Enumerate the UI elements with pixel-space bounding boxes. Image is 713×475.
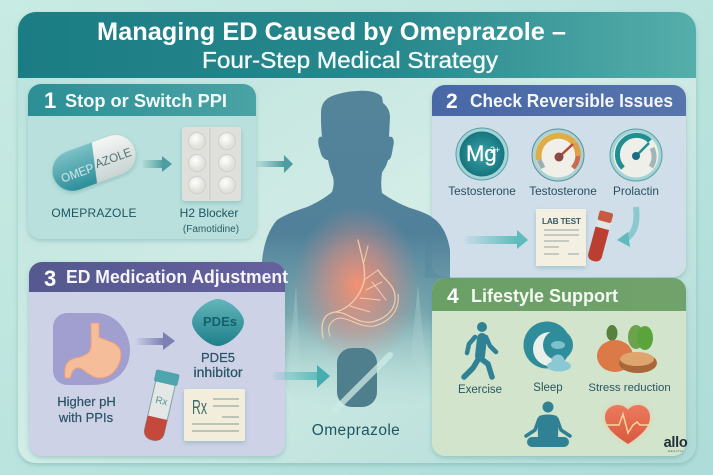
title banner xyxy=(18,12,696,78)
arrow: panel 1 to body xyxy=(256,155,293,173)
icon: Mg badge: 2+ xyxy=(490,145,500,155)
label stress reduction: Stress reduction xyxy=(588,382,671,394)
icon: gauge 1 xyxy=(532,129,584,181)
label higher pH: Higher pH xyxy=(57,394,116,409)
icon: prescription pad xyxy=(184,389,245,441)
logo: allo xyxy=(664,435,688,451)
subtitle: Four-Step Medical Strategy xyxy=(202,47,499,73)
panel 3: ED medication adjustment: with PPIs xyxy=(58,410,114,425)
icon: meditation figure xyxy=(526,402,570,447)
panel 3: ED medication adjustment: inhibitor xyxy=(193,364,243,380)
icon: walking person xyxy=(464,322,496,377)
label exercise: Exercise xyxy=(458,384,502,396)
label prolactin: Prolactin xyxy=(613,184,659,198)
icon: blood tube xyxy=(587,210,613,263)
title: Managing ED Caused by Omeprazole – xyxy=(97,18,566,46)
icon: moon and clouds xyxy=(524,322,573,372)
panel 3: ED medication adjustment: ED Medication Adjustment xyxy=(66,267,288,287)
stomach in body xyxy=(322,240,398,338)
omeprazole label: Omeprazole xyxy=(312,422,400,439)
icon: omeprazole capsule xyxy=(47,129,141,197)
panel 3 heading: 3 xyxy=(44,266,56,291)
body shoulder over panel 2 xyxy=(426,214,450,278)
icon: PDE5 diamond pill: PDEs xyxy=(203,314,237,329)
icon: omeprazole capsule: AZOLE xyxy=(94,147,134,171)
label H2 blocker: H2 Blocker xyxy=(180,206,238,220)
panel 2 heading: 2 xyxy=(446,90,458,113)
crossed-out omeprazole pill xyxy=(335,348,390,410)
panel 1: stop or switch PPI xyxy=(28,84,256,239)
panel 4: lifestyle support xyxy=(432,278,688,456)
icon: Rx tube xyxy=(141,369,180,443)
label sleep: Sleep xyxy=(533,382,563,394)
panel 4 heading: 4 xyxy=(447,285,459,308)
panel 2: check reversible issues xyxy=(432,85,686,277)
label famotidine: (Famotidine) xyxy=(183,224,239,235)
panel 1: stop or switch PPI: Stop or Switch PPI xyxy=(65,91,227,111)
label omeprazole: OMEPRAZOLE xyxy=(51,206,137,220)
icon: stomach xyxy=(53,313,130,385)
arrow: curved to lab xyxy=(622,207,636,241)
icon: lab test report xyxy=(536,209,586,266)
icon: lab test report: LAB TEST xyxy=(542,216,581,226)
icon: gauge 2 xyxy=(610,129,662,181)
arrow xyxy=(137,332,175,350)
icon: omeprazole capsule: OMEP xyxy=(60,163,96,186)
arrow: panel 3 to body xyxy=(273,365,330,388)
label testosterone: Testosterone xyxy=(448,184,516,198)
label PDE5 inhibitor: PDE5 xyxy=(201,350,235,365)
label testosterone: Testosterone xyxy=(529,184,597,198)
panel 1 heading: 1 xyxy=(44,88,56,113)
panel 4: lifestyle support: Lifestyle Support xyxy=(471,286,618,306)
panel 2: check reversible issues: Check Reversible Issues xyxy=(470,91,673,111)
panel 3: ED medication adjustment xyxy=(29,262,288,456)
icon: heart with pulse xyxy=(604,405,650,444)
arrow: body to lab xyxy=(465,230,528,249)
icon: prescription pad: Rx xyxy=(192,397,207,419)
icon: PDE5 diamond pill xyxy=(192,299,244,346)
human silhouette xyxy=(262,91,450,425)
icon: blister pack xyxy=(182,127,241,201)
icon: fruit and nut xyxy=(597,325,657,373)
icon: Mg badge: Mg xyxy=(466,141,497,166)
icon: Rx tube: Rx xyxy=(154,395,169,408)
icon: Mg badge xyxy=(456,128,508,180)
logo: HEALTH xyxy=(668,449,683,453)
arrow xyxy=(143,156,172,172)
